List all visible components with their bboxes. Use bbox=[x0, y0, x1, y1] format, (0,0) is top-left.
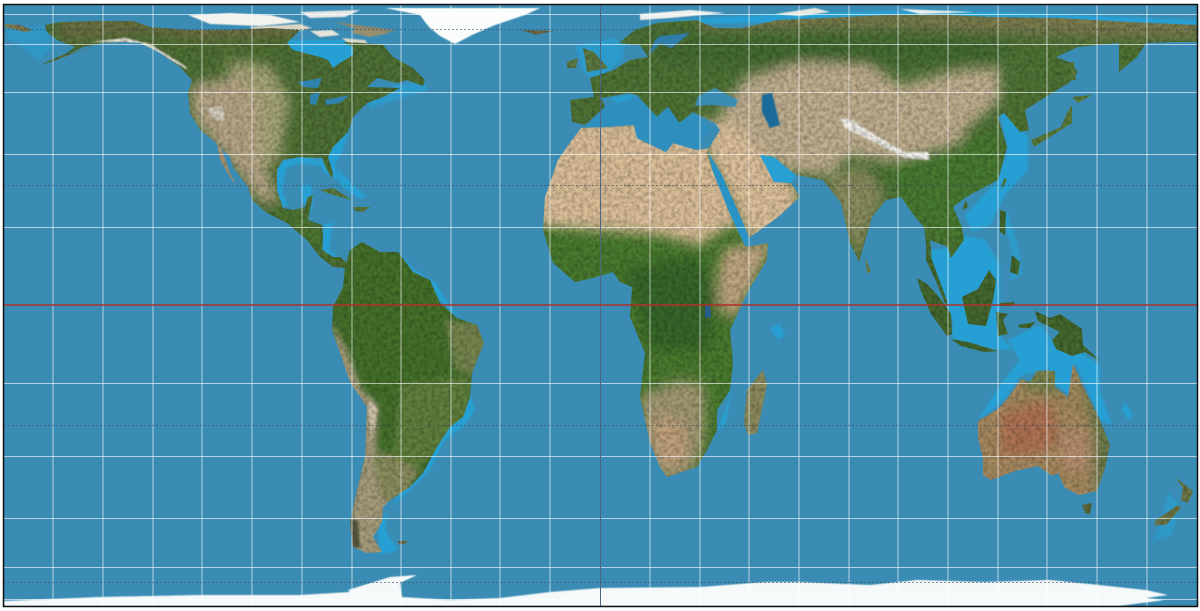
North America bbox=[40, 21, 425, 268]
Great Lakes bbox=[298, 78, 350, 105]
Persian Gulf bbox=[760, 155, 796, 183]
Tasmania bbox=[1082, 503, 1092, 514]
Alaska peninsula bbox=[42, 44, 100, 65]
Japan bbox=[1031, 62, 1092, 147]
Arctic islands bbox=[188, 8, 975, 45]
equator bbox=[4, 304, 1197, 306]
Iceland bbox=[522, 30, 554, 35]
Baja California bbox=[217, 143, 236, 185]
Caribbean islands bbox=[320, 188, 370, 212]
Australia bbox=[978, 364, 1110, 495]
Sri Lanka bbox=[865, 257, 871, 273]
prime meridian bbox=[600, 4, 602, 606]
Madagascar bbox=[744, 370, 767, 435]
New Zealand bbox=[1154, 478, 1193, 525]
inland seas bbox=[585, 33, 780, 152]
Lake Victoria bbox=[705, 305, 711, 318]
Eurasia bbox=[570, 15, 1197, 262]
Antarctica bbox=[4, 575, 1168, 606]
South America bbox=[332, 242, 484, 553]
British Isles bbox=[567, 48, 608, 72]
Chukotka tip bbox=[5, 24, 33, 32]
Falkland Islands bbox=[398, 541, 408, 544]
Maritime Southeast Asia bbox=[917, 210, 1100, 361]
Taiwan and Hainan bbox=[962, 178, 1007, 210]
Africa bbox=[535, 120, 775, 485]
Red Sea bbox=[708, 152, 750, 246]
Greenland bbox=[385, 8, 540, 44]
